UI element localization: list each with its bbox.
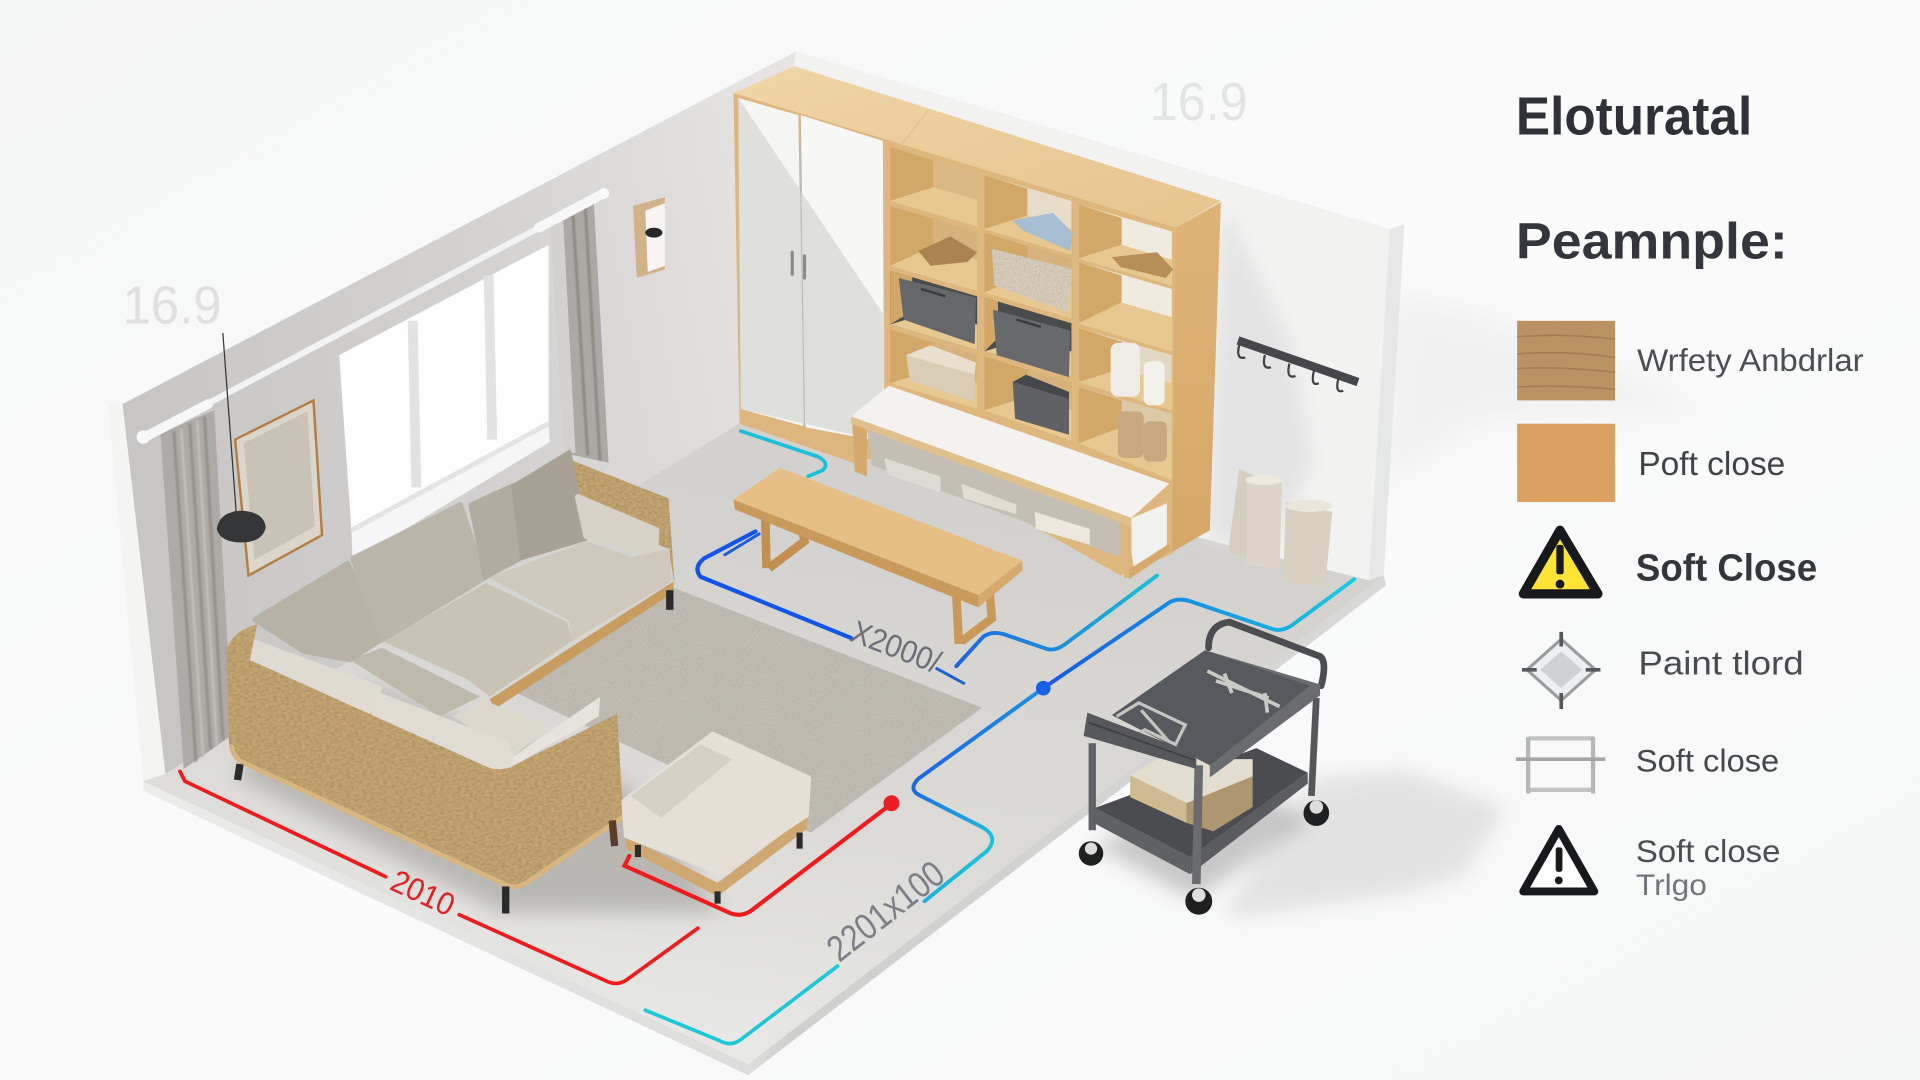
faint watermark left: 16.9 bbox=[122, 275, 222, 335]
rolled mats bbox=[1228, 469, 1332, 589]
back cushion middle bbox=[353, 504, 485, 640]
seat middle bbox=[383, 583, 573, 697]
label: soft close trigo: Soft close bbox=[1636, 833, 1780, 869]
low wooden bench bbox=[733, 468, 1022, 644]
front bolster right bbox=[373, 693, 513, 767]
label: soft close bold: Soft Close bbox=[1636, 547, 1817, 589]
pendant lamp bbox=[217, 333, 266, 542]
legend panel bbox=[1516, 87, 1864, 902]
chaise seat bbox=[453, 700, 549, 757]
top tray bbox=[1112, 650, 1320, 765]
legend heading two: Peamnple: bbox=[1516, 211, 1788, 269]
bench left leg bbox=[852, 422, 867, 476]
bolster bbox=[578, 497, 656, 553]
front legs bbox=[238, 764, 506, 913]
window sill bbox=[351, 424, 550, 561]
front legs bbox=[1089, 743, 1095, 830]
icon: yellow warning bbox=[1523, 530, 1598, 594]
swatch: oak grain bbox=[1517, 321, 1615, 400]
top width label: X2000/ bbox=[846, 613, 946, 680]
window bbox=[339, 245, 550, 561]
front depth label: 2201x100 bbox=[819, 853, 952, 969]
room shell bbox=[108, 51, 1404, 1075]
front handle bbox=[1084, 713, 1196, 769]
wheel front-left bbox=[1079, 841, 1103, 866]
window mullions bbox=[413, 276, 492, 487]
label: oak grain: Wrfety Anbdrlar bbox=[1637, 342, 1864, 378]
small decor items bbox=[918, 236, 977, 266]
wardrobe door right bbox=[801, 115, 884, 442]
throw pillow bbox=[513, 452, 587, 558]
bench right end panel bbox=[1127, 503, 1167, 568]
label: light oak: Poft close bbox=[1638, 446, 1785, 483]
dark storage bin top-left bbox=[899, 278, 976, 344]
left wall face bbox=[122, 51, 796, 774]
label: soft close: Soft close bbox=[1636, 742, 1779, 778]
faint watermark right: 16.9 bbox=[1150, 72, 1248, 132]
right arm wicker bbox=[572, 460, 675, 585]
right wall end bbox=[1369, 224, 1404, 580]
woven jars bbox=[1118, 411, 1144, 458]
bench top bbox=[733, 468, 1022, 595]
label: paint tlord: Paint tlord bbox=[1638, 646, 1804, 683]
ottoman bbox=[623, 733, 809, 904]
sofa bbox=[227, 452, 675, 913]
wheel front bbox=[1185, 888, 1212, 915]
wheel right bbox=[1303, 800, 1329, 826]
bench cushion bbox=[851, 386, 1169, 518]
icon: diamond bracket bbox=[1522, 632, 1600, 709]
label: soft close trigo bbox=[1636, 833, 1780, 902]
door shadow bbox=[738, 98, 884, 442]
white vases bbox=[1111, 343, 1140, 397]
cart shadow bbox=[1224, 770, 1506, 917]
icon: outline warning bbox=[1523, 829, 1594, 891]
chaise seat back bbox=[350, 648, 480, 716]
wardrobe wood surround bbox=[733, 93, 884, 463]
base frame bbox=[490, 582, 673, 709]
stored boxes under bench bbox=[884, 458, 940, 492]
right curtain bbox=[551, 203, 609, 463]
lower tray bbox=[1095, 748, 1308, 857]
bench under-storage bbox=[867, 429, 1120, 557]
cardboard box bbox=[1130, 759, 1253, 831]
right wall face bbox=[741, 51, 1390, 580]
ottoman cushion bbox=[623, 733, 809, 873]
ottoman legs bbox=[638, 833, 800, 904]
cabinet top bbox=[733, 66, 1221, 228]
framed picture bbox=[235, 400, 322, 576]
swatch: light oak bbox=[1517, 424, 1615, 502]
back handle bbox=[1209, 622, 1324, 686]
floor slab edge bbox=[143, 576, 1386, 1075]
red dimension label: 2010 bbox=[385, 863, 461, 923]
front wicker bbox=[227, 624, 623, 887]
dark storage bin lower bbox=[1013, 375, 1069, 435]
wicker basket bbox=[992, 249, 1073, 312]
sofa floor shadow bbox=[233, 686, 722, 912]
wall sconce bbox=[633, 197, 665, 278]
left curtain bbox=[160, 410, 233, 769]
right legs bbox=[956, 590, 992, 644]
beige box bbox=[906, 345, 976, 402]
right leg bbox=[666, 590, 673, 610]
rod bbox=[144, 193, 604, 437]
back cushion left bbox=[255, 563, 380, 660]
window glass bbox=[339, 245, 549, 530]
back upper strip bbox=[470, 452, 569, 514]
back leg bbox=[1311, 698, 1316, 796]
label: soft close trigo: Trlgo bbox=[1636, 869, 1707, 902]
dark storage bin middle bbox=[993, 310, 1070, 377]
tray tools back bbox=[1207, 671, 1280, 713]
blue junction point bbox=[1036, 681, 1051, 696]
coat hook rail bbox=[1238, 340, 1358, 391]
wicker rim bbox=[231, 744, 623, 887]
cabinet shadow on right wall bbox=[1206, 204, 1313, 546]
left wall end bbox=[108, 402, 165, 781]
cabinet bbox=[733, 66, 1221, 579]
blue and cyan dimension lines bbox=[645, 431, 1354, 1044]
front bolster left bbox=[250, 640, 380, 716]
small pillow bbox=[513, 697, 600, 767]
red dimension lines bbox=[180, 771, 899, 983]
rug bbox=[514, 585, 982, 833]
ottoman base bbox=[626, 816, 807, 896]
door handles bbox=[792, 252, 804, 278]
back cushion right bbox=[470, 485, 522, 578]
tray tools front bbox=[1117, 703, 1185, 744]
icon: rail bracket bbox=[1516, 737, 1605, 793]
utility cart bbox=[1079, 622, 1329, 915]
cabinet side panel bbox=[1172, 202, 1221, 552]
red endpoint bbox=[883, 795, 899, 811]
floor bbox=[143, 422, 1384, 1064]
legend heading one: Eloturatal bbox=[1516, 87, 1752, 147]
shelf cells bbox=[890, 147, 1172, 480]
left legs bbox=[765, 518, 804, 568]
curtain rod and curtains bbox=[137, 188, 609, 769]
wardrobe door left bbox=[738, 98, 803, 426]
seat right bbox=[489, 541, 671, 640]
window bottom rail bbox=[351, 424, 549, 530]
wood shelving body bbox=[884, 137, 1178, 576]
